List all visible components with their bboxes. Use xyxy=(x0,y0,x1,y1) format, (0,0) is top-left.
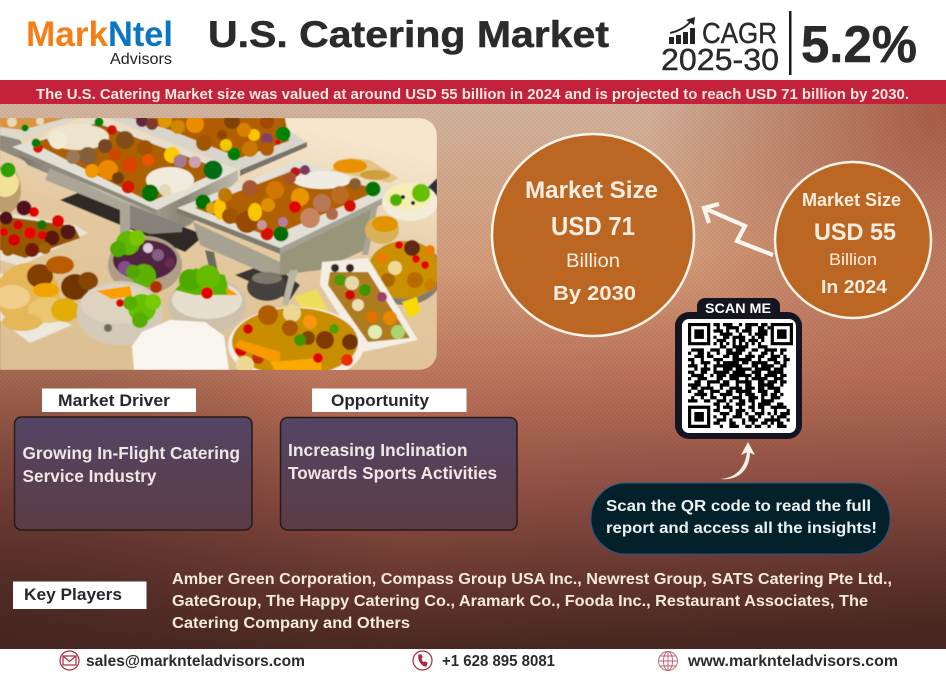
platter right xyxy=(367,240,443,305)
icon: globe xyxy=(658,652,678,670)
key players xyxy=(13,571,892,632)
arrow: curved pointer to QR code xyxy=(720,442,755,479)
circle: market size 2024: In 2024 xyxy=(821,277,887,297)
callout: scan the QR code xyxy=(591,483,890,554)
tray C pan body xyxy=(193,222,285,275)
QR code card xyxy=(675,298,802,439)
circle: market size 2024: USD 55 xyxy=(814,219,896,246)
footer xyxy=(0,649,946,674)
icon: email xyxy=(60,651,79,670)
key players list: Catering Company and Others xyxy=(172,615,410,632)
heading: key players xyxy=(13,582,146,609)
snacks top right xyxy=(330,158,398,183)
panel: opportunity xyxy=(280,388,517,530)
logo: MarkNtel Advisors: Mark xyxy=(26,15,109,54)
top-left tray xyxy=(0,118,80,140)
summary band: The U.S. Catering Market size was valued at around USD 55 billion in 2024 and is projected to reach USD 71 billion by 2030. xyxy=(36,87,909,103)
panel: market driver: Growing In-Flight Catering xyxy=(22,443,240,463)
circle: market size 2030: Billion xyxy=(566,251,620,272)
CAGR label xyxy=(661,18,779,77)
panel: opportunity: Increasing Inclination xyxy=(288,440,468,460)
back tray xyxy=(108,113,307,176)
panel: market driver: Service Industry xyxy=(22,466,157,486)
white long tray xyxy=(320,258,418,352)
logo: MarkNtel Advisors: Ntel xyxy=(108,15,173,54)
key players list xyxy=(172,571,892,632)
summary band xyxy=(0,80,946,104)
logo: MarkNtel Advisors xyxy=(26,15,173,68)
bowl with greens right xyxy=(365,183,438,244)
canape plate xyxy=(0,200,88,266)
website: www.marknteladvisors.com xyxy=(687,653,898,670)
rice bowl right xyxy=(168,265,246,333)
tray A: rim and food xyxy=(12,118,238,214)
circle: market size 2024 xyxy=(775,162,931,318)
heading: market driver: Market Driver xyxy=(58,391,170,410)
heading: opportunity: Opportunity xyxy=(331,391,430,410)
rice bowl left xyxy=(77,281,163,345)
CAGR label: 2025-30 xyxy=(661,42,779,77)
bread platter xyxy=(0,256,98,343)
CAGR label: CAGR xyxy=(702,18,777,50)
icon: phone xyxy=(413,651,432,670)
phone number: +1 628 895 8081 xyxy=(442,653,555,670)
key players list: Amber Green Corporation, Compass Group USA Inc., Newrest Group, SATS Catering Pte Ltd., xyxy=(172,571,892,588)
QR code card: SCAN ME xyxy=(705,300,771,316)
white plates xyxy=(132,320,229,370)
photo: catering buffet food xyxy=(0,113,443,383)
email address: sales@marknteladvisors.com xyxy=(86,653,305,670)
arrow: growth zigzag xyxy=(704,204,773,255)
panel: market driver xyxy=(14,388,252,530)
circle: market size 2024: Billion xyxy=(829,250,877,269)
heading: key players: Key Players xyxy=(24,585,122,604)
key players list: GateGroup, The Happy Catering Co., Aramark Co., Fooda Inc., Restaurant Associates, The xyxy=(172,593,868,610)
callout: scan the QR code: Scan the QR code to read the full xyxy=(606,498,871,515)
panel: opportunity: Towards Sports Activities xyxy=(288,463,497,483)
circle: market size 2030: Market Size xyxy=(525,177,658,204)
bowl left edge xyxy=(0,166,21,214)
heading: opportunity xyxy=(312,388,466,412)
heading: market driver xyxy=(42,388,196,412)
salad bowl xyxy=(108,230,182,294)
CAGR value: 5.2% xyxy=(801,16,917,74)
tray C rim and food xyxy=(177,160,393,254)
circle: market size 2030 xyxy=(492,134,694,336)
logo: MarkNtel Advisors: Advisors xyxy=(110,51,172,68)
circle: market size 2030: USD 71 xyxy=(551,211,635,241)
QR modules xyxy=(688,325,791,426)
tray A: pan body xyxy=(20,156,238,228)
callout: scan the QR code: report and access all the insights! xyxy=(606,520,877,537)
title: U.S. Catering Market xyxy=(208,14,609,55)
header bar xyxy=(0,0,946,80)
circle: market size 2030: By 2030 xyxy=(553,283,636,305)
yellow cards xyxy=(294,289,328,313)
icon: CAGR growth chart xyxy=(669,17,695,44)
circle: market size 2024: Market Size xyxy=(802,190,901,210)
dessert platter xyxy=(228,304,364,370)
